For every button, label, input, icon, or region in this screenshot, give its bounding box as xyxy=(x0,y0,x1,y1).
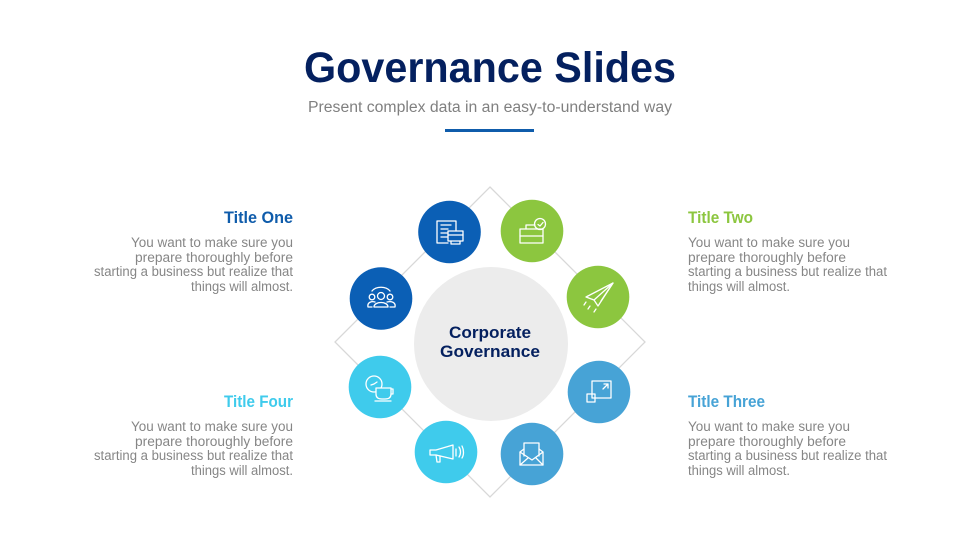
text block: Title Three: starting a business but realize that xyxy=(688,448,887,463)
center circle: Corporate xyxy=(449,324,531,342)
text block: Title Three: You want to make sure you xyxy=(688,419,850,434)
text block: Title Two: prepare thoroughly before xyxy=(688,250,846,265)
text block: Title Four: prepare thoroughly before xyxy=(135,434,293,449)
text block: Title Three: prepare thoroughly before xyxy=(688,434,846,449)
text block: Title Two xyxy=(688,209,887,294)
icon: document and card xyxy=(418,201,481,263)
icon: clock and coffee cup xyxy=(349,356,411,418)
text block: Title Two: Title Two xyxy=(688,209,753,227)
icon: paper plane xyxy=(567,266,629,328)
title: Governance Slides xyxy=(304,44,676,92)
text block: Title Three: Title Three xyxy=(688,393,765,411)
subtitle: Present complex data in an easy-to-understand way xyxy=(308,99,672,116)
diamond outline xyxy=(335,187,645,497)
center circle: Governance xyxy=(440,343,540,361)
text block: Title One: Title One xyxy=(224,209,293,227)
text block: Title Two: things will almost. xyxy=(688,279,790,294)
text block: Title One: starting a business but realize that xyxy=(94,264,293,279)
icon: briefcase with check xyxy=(501,200,563,262)
text block: Title One: You want to make sure you xyxy=(131,235,293,250)
icon: megaphone xyxy=(415,421,477,483)
text block: Title Three xyxy=(688,393,887,478)
text block: Title Four: You want to make sure you xyxy=(131,419,293,434)
text block: Title Four xyxy=(94,393,294,478)
text block: Title Four: starting a business but realize that xyxy=(94,448,293,463)
center circle xyxy=(414,267,568,421)
text block: Title Two: starting a business but realize that xyxy=(688,264,887,279)
text block: Title Four: Title Four xyxy=(224,393,294,411)
icon: people group xyxy=(350,267,412,330)
text block: Title Four: things will almost. xyxy=(191,463,293,478)
text block: Title Three: things will almost. xyxy=(688,463,790,478)
text block: Title One: prepare thoroughly before xyxy=(135,250,293,265)
icon: open envelope xyxy=(501,423,563,485)
text block: Title One xyxy=(94,209,293,294)
text block: Title Two: You want to make sure you xyxy=(688,235,850,250)
text block: Title One: things will almost. xyxy=(191,279,293,294)
icon: resize squares xyxy=(568,361,630,423)
title underline xyxy=(445,129,534,132)
